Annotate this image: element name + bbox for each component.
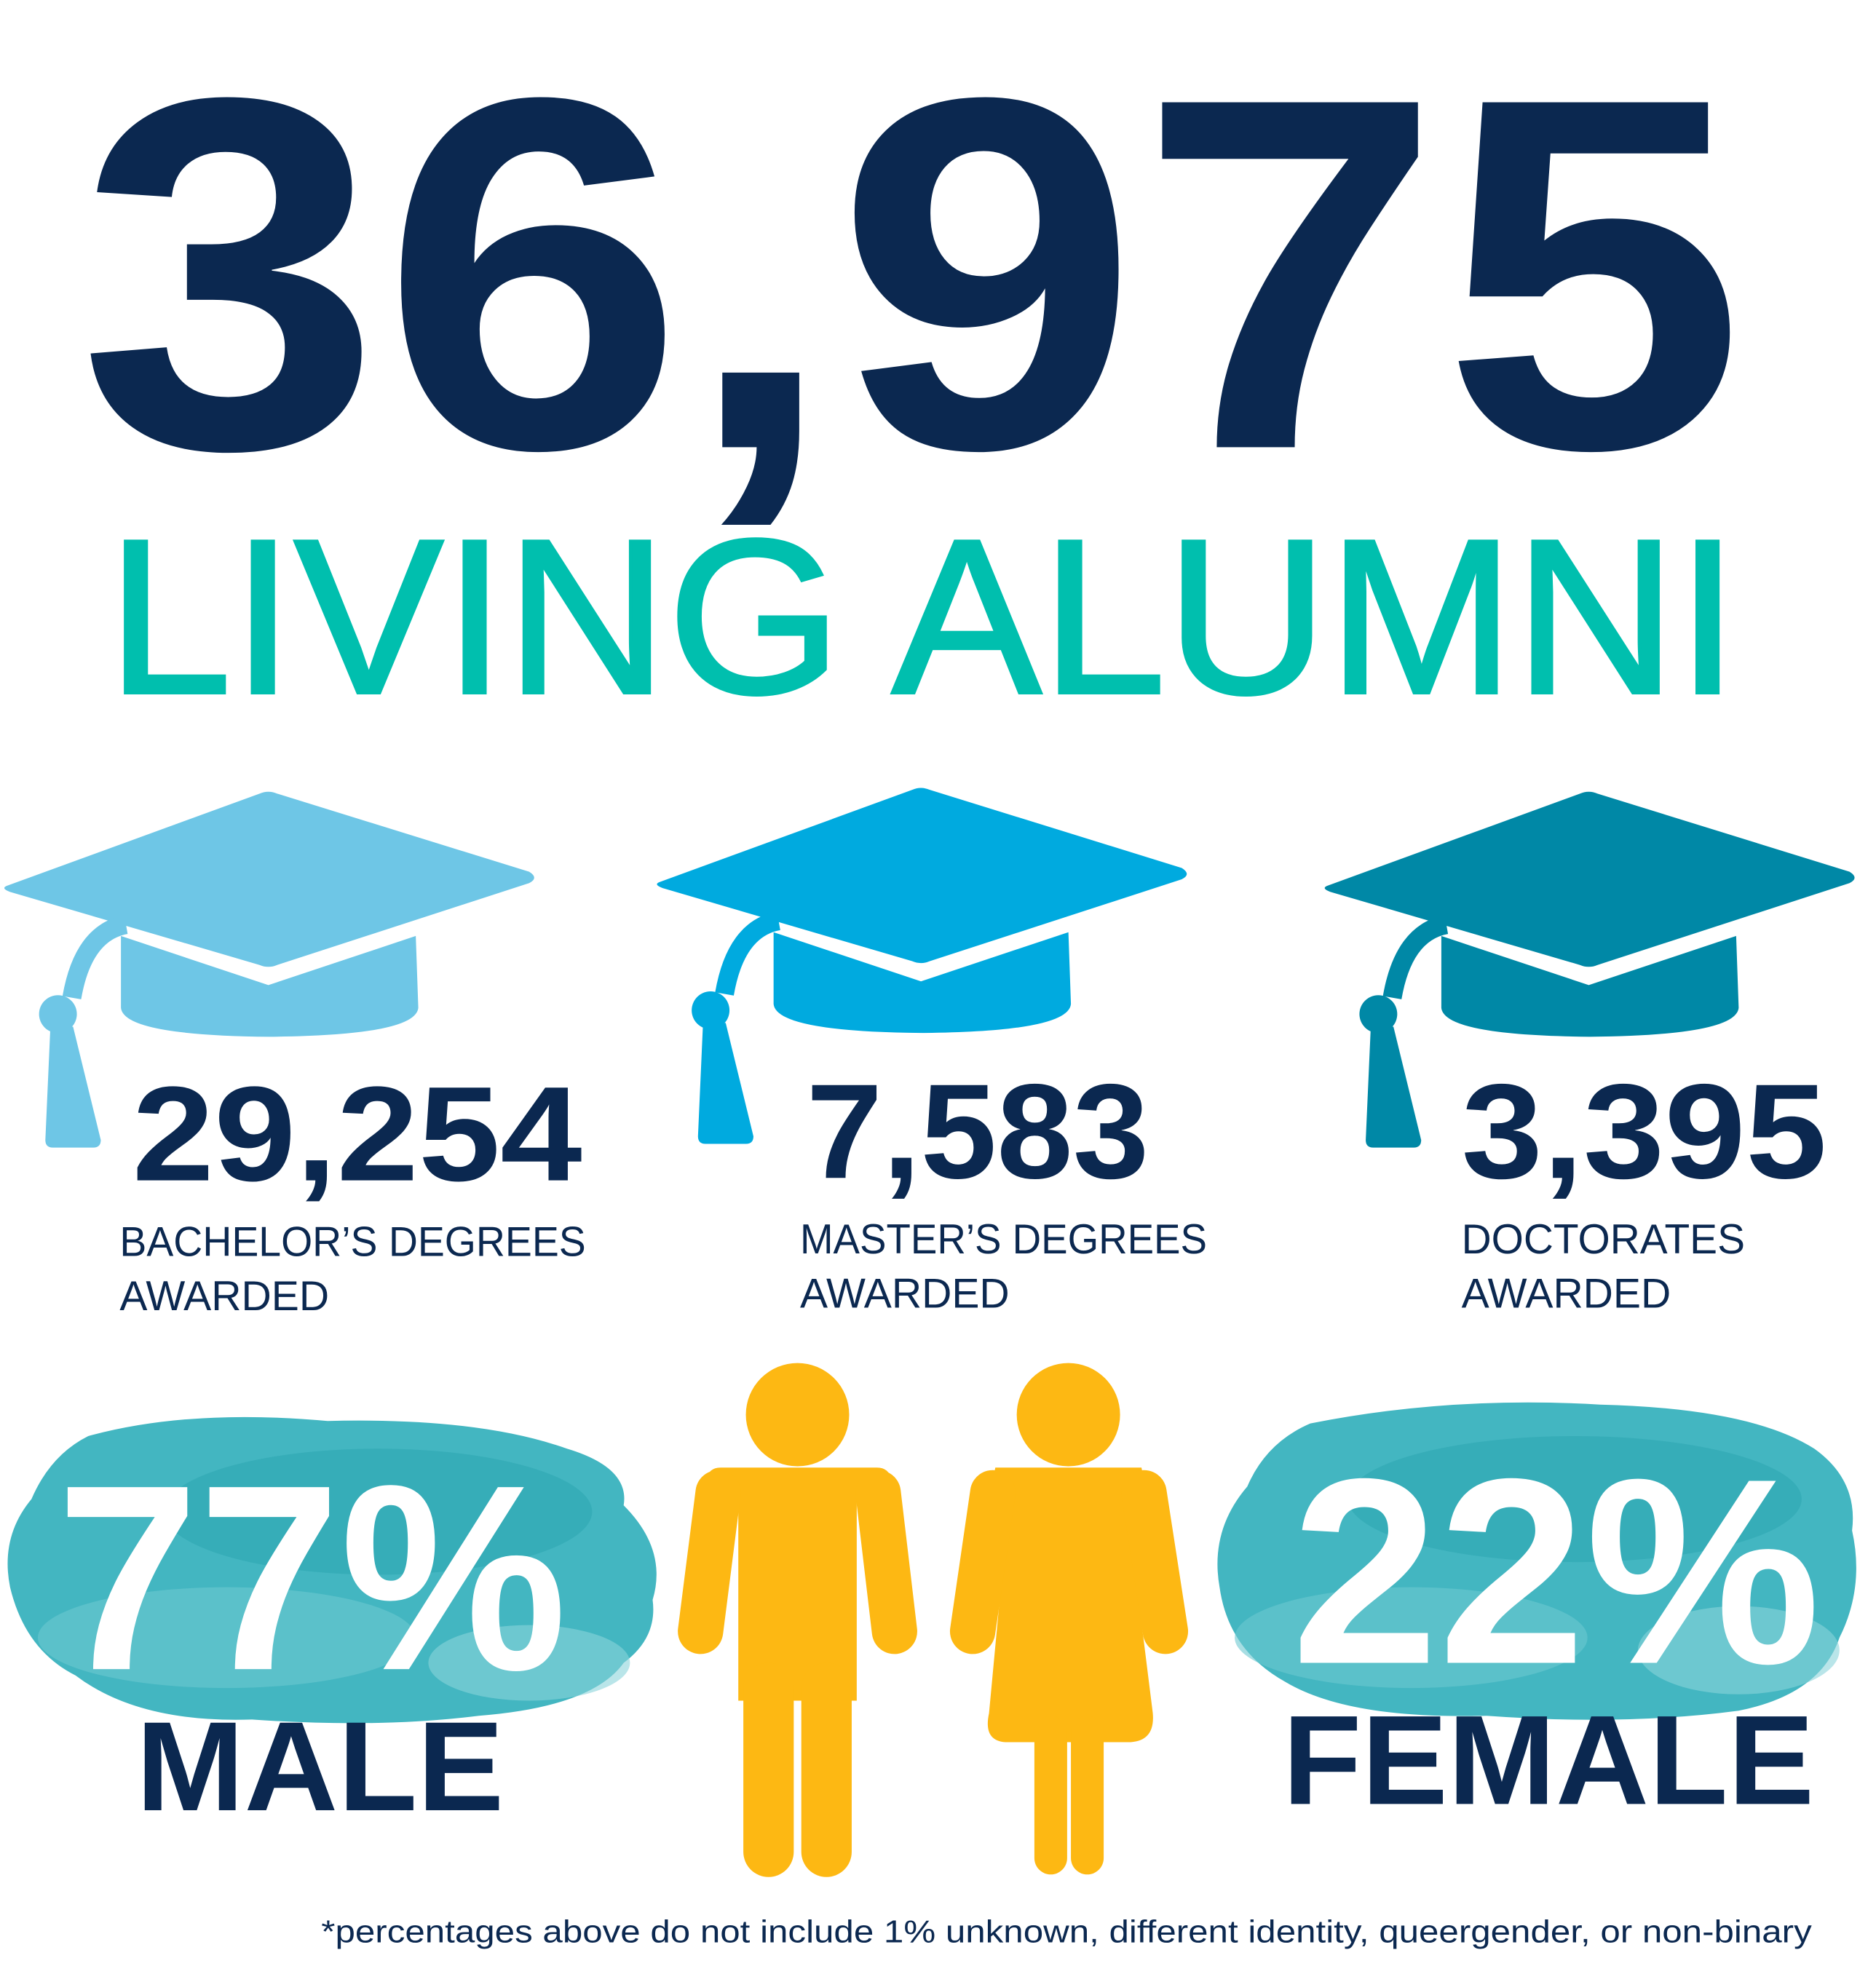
percent 22%: 22% — [1291, 1424, 1821, 1720]
panel: master's — [657, 788, 1207, 1317]
icon: cap blue — [657, 788, 1187, 1143]
panel: male — [7, 1417, 657, 1838]
number: 3,395: 3,395 — [1462, 1056, 1827, 1207]
watercolor blob left — [7, 1417, 657, 1723]
label: bachelor's degrees awarded: AWARDED — [119, 1273, 329, 1320]
label MALE: MALE — [136, 1696, 504, 1838]
percent 77%: 77% — [57, 1430, 567, 1726]
icon: man figure — [700, 1363, 895, 1852]
icon: cap light blue — [4, 792, 534, 1148]
watercolor blob right — [1217, 1403, 1856, 1720]
label: doctorates awarded: DOCTORATES — [1462, 1216, 1745, 1263]
footnote: *percentages above do not include 1% unknown, different identity, queergender, or non-binary — [321, 1915, 1812, 1950]
label: doctorates awarded: AWARDED — [1462, 1270, 1671, 1317]
label FEMALE: FEMALE — [1283, 1689, 1814, 1831]
icon: woman figure — [973, 1363, 1165, 1858]
title: big number: 36,975 — [78, 0, 1745, 553]
panel: doctorates — [1325, 792, 1855, 1317]
subtitle: living alumni: LIVING ALUMNI — [107, 494, 1738, 740]
label: bachelor's degrees awarded: BACHELOR’S DEGREES — [119, 1219, 586, 1266]
label: master's degrees awarded: AWARDED — [800, 1270, 1010, 1317]
panel: female — [1217, 1403, 1856, 1831]
number: 29,254: 29,254 — [132, 1059, 582, 1210]
icon: cap dark teal — [1325, 792, 1855, 1148]
label: master's degrees awarded: MASTER’S DEGREES — [800, 1216, 1207, 1263]
panel: bachelor's — [4, 792, 586, 1320]
number: 7,583: 7,583 — [807, 1056, 1149, 1207]
